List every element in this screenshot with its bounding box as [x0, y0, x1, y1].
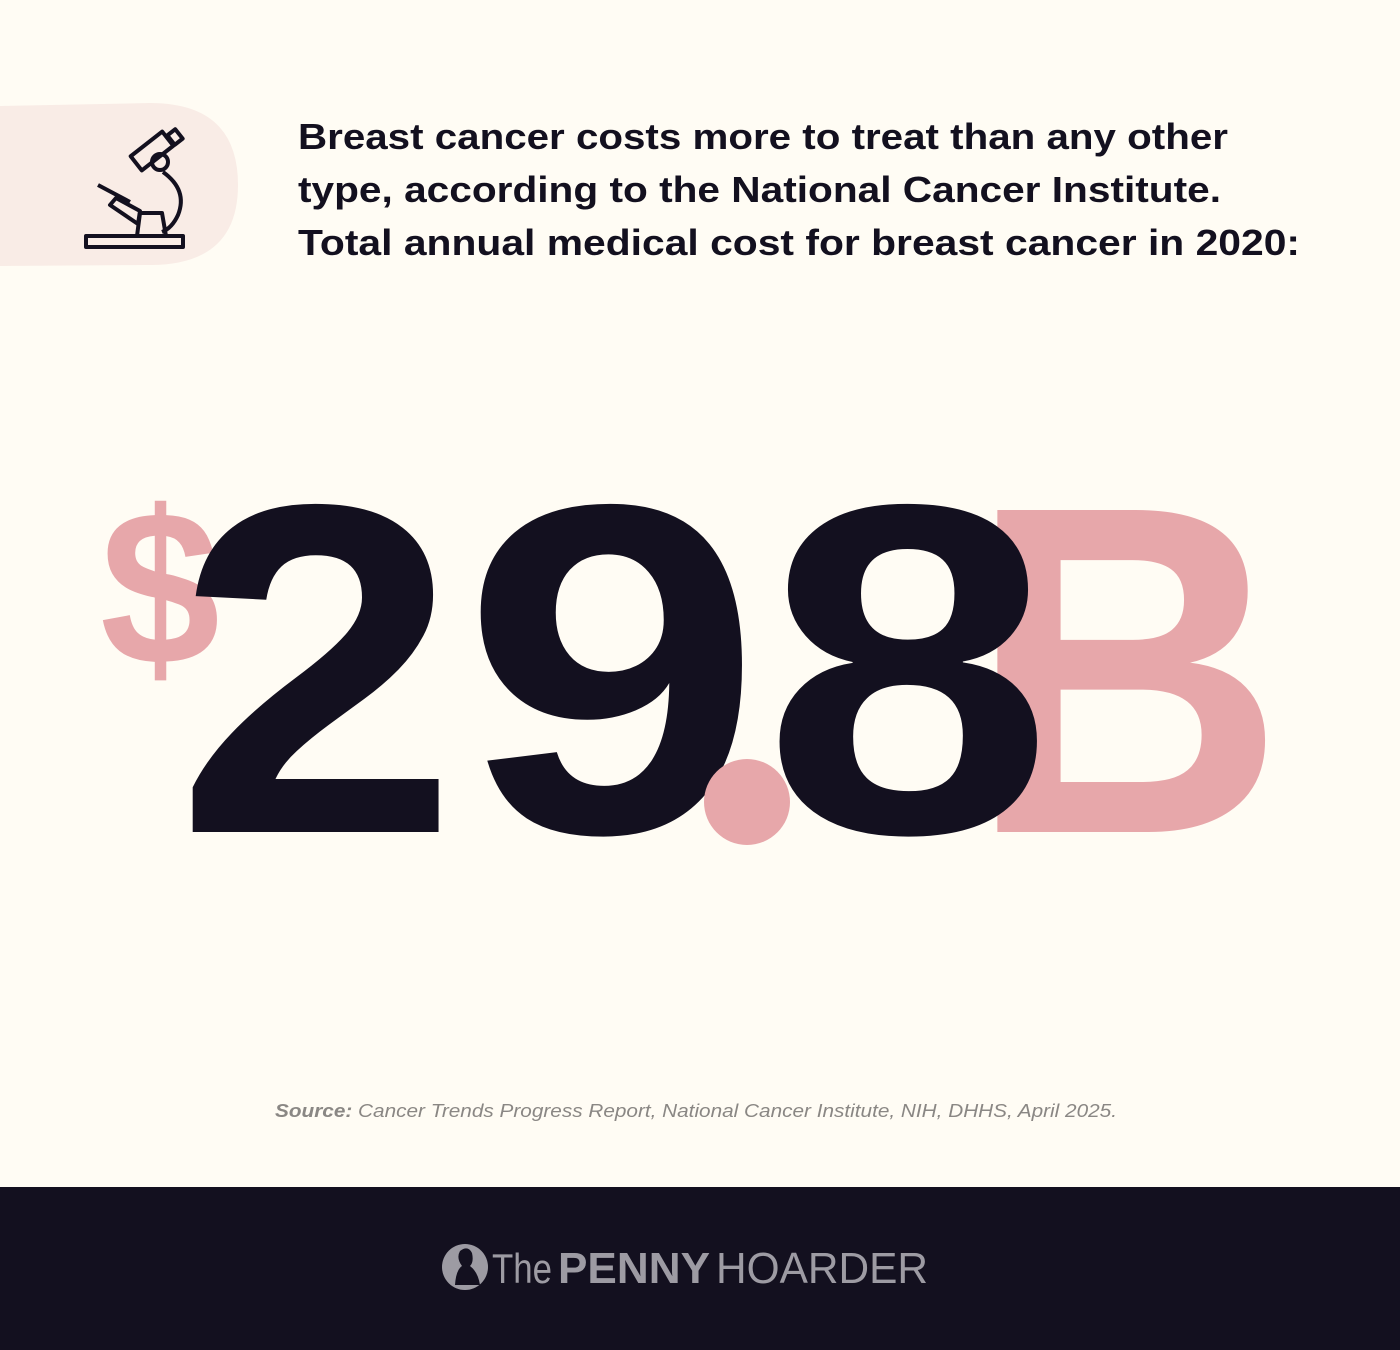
- big number $29.8B: 8: [763, 407, 1053, 932]
- big number $29.8B: $: [100, 465, 220, 711]
- footer: [0, 1187, 1400, 1350]
- big number $29.8B: B: [968, 409, 1285, 932]
- heading text: Breast cancer costs more to treat than any other: [298, 116, 1228, 157]
- big number $29.8B: 9: [462, 407, 762, 932]
- heading text: [298, 116, 1300, 263]
- icon: microscope: [86, 129, 183, 247]
- logo: HOARDER: [716, 1244, 928, 1293]
- big number $29.8B: 2: [175, 407, 459, 932]
- heading text: type, according to the National Cancer Institute.: [298, 169, 1221, 210]
- heading text: Total annual medical cost for breast cancer in 2020:: [298, 222, 1300, 263]
- logo: [442, 1244, 928, 1293]
- big number $29.8B: [100, 407, 1285, 932]
- logo: The: [492, 1245, 552, 1292]
- icon background blob: [0, 103, 238, 266]
- source: Source: Cancer Trends Progress Report, National Cancer Institute, NIH, DHHS, April 2025.: [275, 1101, 1117, 1121]
- logo: PENNY: [558, 1244, 710, 1293]
